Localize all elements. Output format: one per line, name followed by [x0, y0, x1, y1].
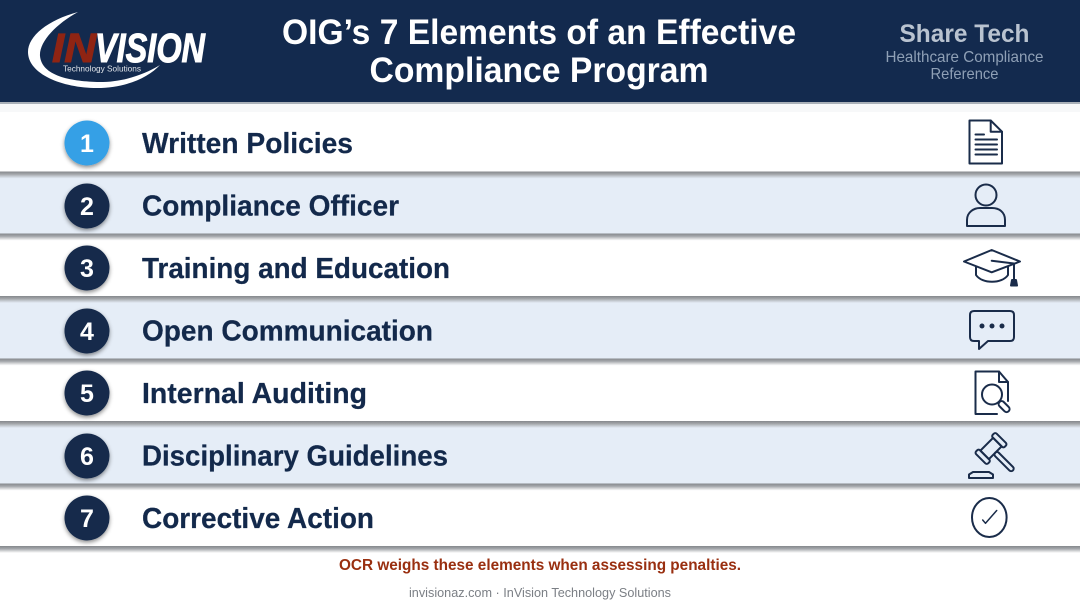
number badge 6: 6 — [80, 443, 94, 471]
label 3: Training and Education — [142, 253, 450, 285]
number badge 3 — [64, 246, 110, 290]
row 6: Disciplinary Guidelines — [0, 421, 1080, 484]
number badge 4 — [64, 308, 110, 354]
logo swoosh — [28, 12, 160, 88]
number badge 7: 7 — [80, 505, 94, 533]
number badge 6 — [64, 434, 110, 478]
title: OIG’s 7 Elements of an Effective — [282, 13, 796, 52]
row 4: Open Communication — [0, 296, 1080, 358]
callout: penalties note: OCR weighs these elements when assessing penalties. — [339, 557, 741, 574]
label 6: Disciplinary Guidelines — [142, 440, 448, 472]
number badge 5: 5 — [80, 380, 94, 408]
number badge 3: 3 — [80, 255, 94, 283]
icon: document — [970, 120, 1002, 164]
icon: speech bubble — [970, 311, 1014, 349]
footer source: invisionaz.com · InVision Technology Solutions — [409, 585, 671, 600]
row 5: Internal Auditing — [0, 358, 1080, 421]
row 1: Written Policies — [0, 112, 1080, 172]
header right block: Share Tech: Share Tech — [900, 20, 1030, 48]
header right block: Share Tech: Reference — [930, 66, 999, 83]
number badge 5 — [64, 370, 110, 416]
label 7: Corrective Action — [142, 503, 374, 535]
icon: graduation cap — [964, 250, 1020, 286]
logo wordmark VISION: VISION — [95, 25, 206, 71]
label 1: Written Policies — [142, 128, 353, 160]
label 5: Internal Auditing — [142, 378, 367, 410]
icon: person — [967, 184, 1005, 226]
title: Compliance Program — [370, 51, 708, 90]
row 2: Compliance Officer — [0, 172, 1080, 234]
header banner — [0, 0, 1080, 112]
number badge 4: 4 — [80, 318, 94, 346]
icon: gavel — [969, 432, 1023, 481]
row 7: Corrective Action — [0, 484, 1080, 553]
number badge 2: 2 — [80, 193, 94, 221]
label 2: Compliance Officer — [142, 190, 399, 222]
icon: check shield — [972, 498, 1007, 537]
logo wordmark IN: IN — [52, 25, 97, 71]
logo: InVision Technology Solutions — [28, 12, 206, 88]
logo tagline: Technology Solutions — [63, 64, 141, 74]
header right block: Share Tech: Healthcare Compliance — [886, 49, 1044, 66]
row 3: Training and Education — [0, 234, 1080, 296]
label 4: Open Communication — [142, 316, 433, 348]
title — [282, 13, 796, 90]
number badge 1: 1 — [80, 130, 94, 158]
header right block: Share Tech — [886, 20, 1044, 83]
number badge 7 — [64, 496, 110, 540]
icon: document with magnifier — [976, 372, 1011, 414]
number badge 1 — [64, 120, 110, 166]
number badge 2 — [64, 184, 110, 228]
